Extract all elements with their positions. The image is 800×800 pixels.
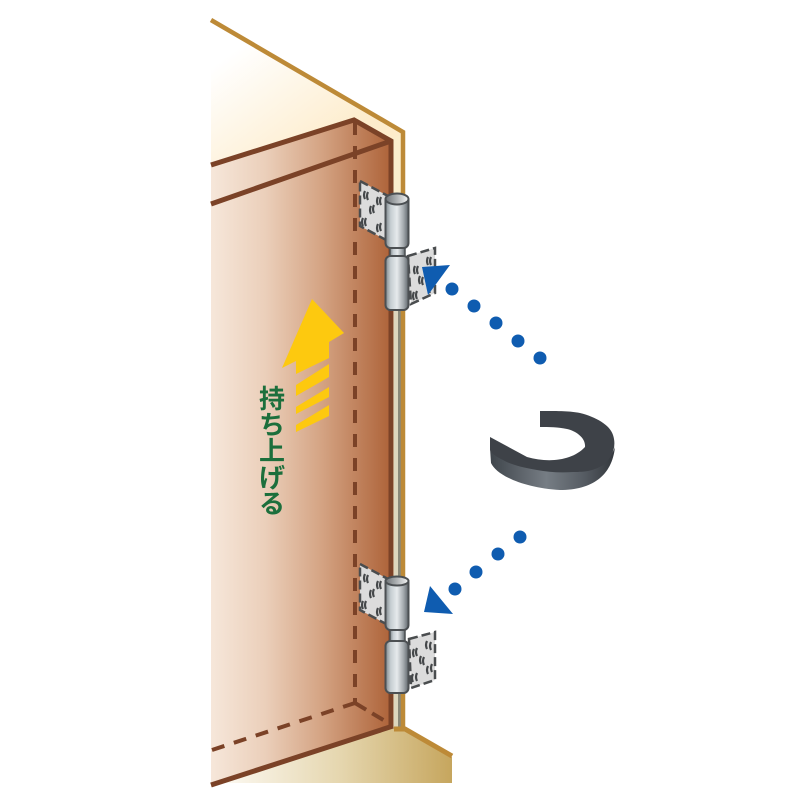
left plate <box>360 181 388 241</box>
lower dotted arrow <box>424 530 526 614</box>
right plate <box>409 632 435 688</box>
label: lift up: 持 <box>259 384 285 414</box>
right plate <box>408 248 435 304</box>
floor <box>211 727 452 787</box>
lower barrel <box>386 641 408 693</box>
label: lift up: げ <box>259 463 285 493</box>
door panel <box>211 119 393 787</box>
upper dotted arrow <box>422 265 546 364</box>
upper barrel <box>386 576 408 630</box>
washer side <box>490 447 615 490</box>
upper barrel <box>386 194 408 248</box>
C-shaped washer <box>490 411 615 490</box>
cabinet side frame <box>211 20 403 731</box>
floor edge <box>394 729 452 756</box>
label: lift up: ち <box>259 410 285 440</box>
label: lift up: 上 <box>259 436 285 466</box>
lift arrow <box>282 299 344 432</box>
upper hinge <box>360 181 435 310</box>
left plate <box>360 564 388 625</box>
neck <box>390 246 405 260</box>
door outlines <box>211 120 393 785</box>
hidden door edges <box>212 122 390 750</box>
label: lift up: る <box>259 489 285 519</box>
cabinet interior wall <box>211 20 404 162</box>
washer top face <box>490 411 614 472</box>
lower barrel <box>386 256 408 310</box>
neck <box>390 628 405 644</box>
lower hinge <box>360 564 435 693</box>
